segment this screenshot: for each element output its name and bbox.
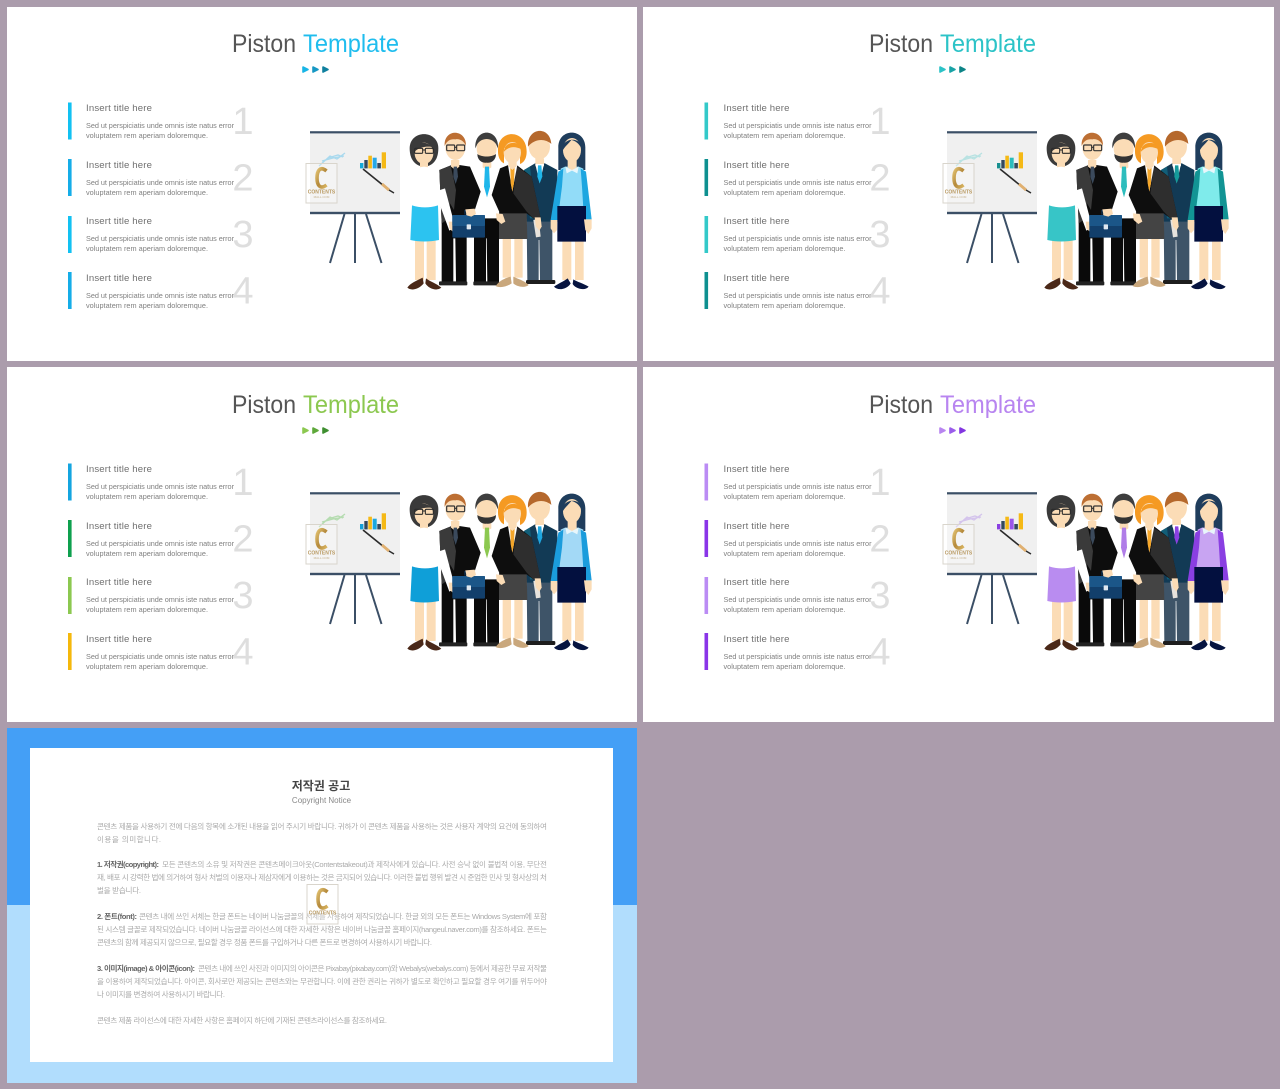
intro paragraph bbox=[97, 821, 547, 844]
item 4: Insert title here bbox=[724, 634, 790, 645]
item 3 bbox=[68, 575, 254, 617]
title: Piston bbox=[869, 391, 933, 419]
item 4: 4 bbox=[869, 632, 891, 674]
item 4: voluptatem rem aperiam doloremque. bbox=[86, 662, 208, 671]
item 3: Sed ut perspiciatis unde omnis iste natus error bbox=[86, 595, 235, 604]
item 3: Sed ut perspiciatis unde omnis iste natus error bbox=[724, 234, 872, 243]
section 2 font: 된 시스템 글꼴로 제작되었습니다. 네이버 나눔글꼴 라이선스에 대한 자세한 사항은 네이버 나눔글꼴 홈페이지(hangeul.naver.com)를 참조하세요. 폰트는 bbox=[97, 924, 547, 934]
item 1 bbox=[68, 101, 254, 143]
watermark logo: CONTENTS bbox=[945, 190, 973, 196]
watermark logo bbox=[306, 164, 337, 203]
item 4 bbox=[68, 632, 254, 674]
item 3 bbox=[704, 575, 891, 617]
presentation board bbox=[947, 131, 1037, 263]
section 1 copyright: 재, 배포 시 강력한 법에 의거하여 형사 처벌의 이용자나 제삼자에게 이용하는 것은 금지되어 있습니다. 이러한 불법 행위 발견 시 준엄한 민사 및 형사상의 처 bbox=[97, 872, 547, 882]
watermark logo bbox=[943, 524, 974, 564]
item 2: 2 bbox=[869, 518, 891, 560]
item 3: voluptatem rem aperiam doloremque. bbox=[724, 244, 846, 253]
section 3 image and icon: 을 이용하여 제작되었습니다. 아이콘, 회사로만 제공되는 콘텐츠와는 무관합니다. 이에 관한 권리는 귀하가 별도로 확인하고 필요할 경우 여기를 위두어야 bbox=[97, 976, 547, 986]
item 2: voluptatem rem aperiam doloremque. bbox=[724, 188, 846, 197]
item 2 bbox=[704, 158, 891, 200]
business team illustration bbox=[407, 492, 592, 650]
item 4: Insert title here bbox=[86, 273, 152, 284]
business team illustration bbox=[1044, 131, 1229, 289]
item 1: Sed ut perspiciatis unde omnis iste natus error bbox=[86, 121, 235, 130]
item 2: Sed ut perspiciatis unde omnis iste natus error bbox=[86, 539, 235, 548]
section 1 copyright bbox=[97, 859, 547, 895]
item 4: Sed ut perspiciatis unde omnis iste natus error bbox=[86, 652, 235, 661]
item 1 bbox=[68, 462, 254, 504]
presentation board bbox=[947, 492, 1037, 624]
item 4: Sed ut perspiciatis unde omnis iste natus error bbox=[86, 291, 235, 300]
item 4: Sed ut perspiciatis unde omnis iste natus error bbox=[724, 291, 872, 300]
item 1: Insert title here bbox=[86, 103, 152, 114]
item 2: 2 bbox=[232, 518, 254, 560]
item 3: 3 bbox=[869, 575, 891, 617]
item 3 bbox=[704, 214, 891, 256]
section 2 font: 콘텐츠 내에 쓰인 서체는 한글 폰트는 네이버 나눔글꼴의 서체를 사용하여 제작되었습니다. 한글 외의 모든 폰트는 Windows System에 포함 bbox=[139, 911, 547, 921]
item 3: Sed ut perspiciatis unde omnis iste natus error bbox=[724, 595, 872, 604]
watermark logo bbox=[943, 164, 974, 203]
item 3: voluptatem rem aperiam doloremque. bbox=[86, 244, 208, 253]
watermark logo: CONTENTS bbox=[309, 910, 337, 916]
item 3: Insert title here bbox=[86, 577, 152, 588]
section 1 copyright: 모든 콘텐츠의 소유 및 저작권은 콘텐츠메이크아웃(Contentstakeout)과 제작사에게 있습니다. 사전 승낙 없이 불법적 이용, 무단전 bbox=[162, 859, 547, 869]
arrow markers bbox=[303, 67, 328, 72]
title: Template bbox=[940, 391, 1036, 419]
licence closing line: 콘텐츠 제품 라이선스에 대한 자세한 사항은 홈페이지 하단에 기재된 콘텐츠라이선스를 참조하세요. bbox=[97, 1015, 387, 1025]
item 2: Sed ut perspiciatis unde omnis iste natus error bbox=[86, 178, 235, 187]
section 1 copyright: 1. 저작권(copyright): bbox=[97, 859, 159, 869]
item 1 bbox=[704, 101, 891, 143]
intro paragraph: 이용을 의미합니다. bbox=[97, 834, 161, 844]
notice heading: Copyright Notice bbox=[292, 796, 352, 805]
item 1: 1 bbox=[232, 101, 254, 143]
item 2: voluptatem rem aperiam doloremque. bbox=[86, 188, 208, 197]
title: Piston bbox=[232, 30, 296, 58]
arrow markers bbox=[940, 67, 965, 72]
item 1: Insert title here bbox=[724, 103, 790, 114]
item 2: 2 bbox=[869, 158, 891, 200]
item 4 bbox=[68, 270, 254, 312]
item 2 bbox=[704, 518, 891, 560]
title bbox=[869, 391, 1036, 419]
item 2: voluptatem rem aperiam doloremque. bbox=[86, 549, 208, 558]
section 3 image and icon bbox=[97, 963, 547, 999]
watermark logo: MALL.COM bbox=[951, 556, 967, 560]
item 3: 3 bbox=[869, 214, 891, 256]
watermark logo bbox=[307, 884, 338, 924]
item 2 bbox=[68, 518, 254, 560]
watermark logo: MALL.COM bbox=[314, 195, 330, 199]
arrow markers bbox=[303, 428, 328, 433]
item 3: 3 bbox=[232, 575, 254, 617]
item 1: voluptatem rem aperiam doloremque. bbox=[724, 131, 846, 140]
section 3 image and icon: 3. 이미지(image) & 아이콘(icon): bbox=[97, 963, 195, 973]
item 2: Sed ut perspiciatis unde omnis iste natus error bbox=[724, 178, 872, 187]
item 4: voluptatem rem aperiam doloremque. bbox=[724, 662, 846, 671]
item 4: voluptatem rem aperiam doloremque. bbox=[86, 301, 208, 310]
item 1 bbox=[704, 462, 891, 504]
item 2: voluptatem rem aperiam doloremque. bbox=[724, 549, 846, 558]
section 3 image and icon: 콘텐츠 내에 쓰인 사진과 이미지의 아이콘은 Pixabay(pixabay.com)와 Webalys(webalys.com) 등에서 제공한 무료 저작물 bbox=[198, 963, 547, 973]
title bbox=[869, 30, 1036, 58]
item 4: 4 bbox=[869, 270, 891, 312]
item 2 bbox=[68, 158, 254, 200]
item 2: 2 bbox=[232, 158, 254, 200]
title: Template bbox=[940, 30, 1036, 58]
item 2: Sed ut perspiciatis unde omnis iste natus error bbox=[724, 539, 872, 548]
notice heading bbox=[292, 778, 352, 805]
item 3: voluptatem rem aperiam doloremque. bbox=[724, 605, 846, 614]
business team illustration bbox=[1044, 492, 1229, 650]
section 1 copyright: 벌을 받습니다. bbox=[97, 885, 141, 895]
panel: copyright notice bbox=[7, 728, 637, 1083]
item 1: Sed ut perspiciatis unde omnis iste natus error bbox=[724, 482, 872, 491]
item 2: Insert title here bbox=[724, 160, 790, 171]
item 3 bbox=[68, 214, 254, 256]
item 4: 4 bbox=[232, 632, 254, 674]
item 4: 4 bbox=[232, 270, 254, 312]
presentation board bbox=[310, 131, 400, 263]
item 2: Insert title here bbox=[86, 521, 152, 532]
item 4 bbox=[704, 632, 891, 674]
watermark logo: CONTENTS bbox=[308, 550, 336, 556]
item 1: Sed ut perspiciatis unde omnis iste natus error bbox=[86, 482, 235, 491]
arrow markers bbox=[940, 428, 965, 433]
watermark logo: MALL.COM bbox=[951, 195, 967, 199]
item 1: Insert title here bbox=[724, 464, 790, 475]
watermark logo: CONTENTS bbox=[945, 550, 973, 556]
panel: slide 4 purple bbox=[643, 367, 1274, 722]
item 3: Sed ut perspiciatis unde omnis iste natus error bbox=[86, 234, 235, 243]
item 1: Sed ut perspiciatis unde omnis iste natus error bbox=[724, 121, 872, 130]
section 2 font bbox=[97, 911, 547, 947]
title: Template bbox=[303, 30, 399, 58]
section 3 image and icon: 나 이미지를 변경하여 사용하시기 바랍니다. bbox=[97, 989, 225, 999]
item 1: 1 bbox=[232, 462, 254, 504]
business team illustration bbox=[407, 131, 592, 289]
watermark logo: MALL.COM bbox=[314, 556, 330, 560]
title: Template bbox=[303, 391, 399, 419]
section 2 font: 콘텐츠의 함께 제공되지 않으므로, 필요할 경우 정품 폰트를 구입하거나 다른 폰트로 변경하여 사용하시기 바랍니다. bbox=[97, 937, 432, 947]
item 3: Insert title here bbox=[86, 216, 152, 227]
panel: slide 2 teal bbox=[643, 7, 1274, 361]
item 2: Insert title here bbox=[724, 521, 790, 532]
title bbox=[232, 391, 399, 419]
item 1: voluptatem rem aperiam doloremque. bbox=[86, 131, 208, 140]
item 1: 1 bbox=[869, 462, 891, 504]
title: Piston bbox=[869, 30, 933, 58]
item 3: 3 bbox=[232, 214, 254, 256]
item 1: 1 bbox=[869, 101, 891, 143]
item 3: Insert title here bbox=[724, 216, 790, 227]
item 1: Insert title here bbox=[86, 464, 152, 475]
item 4 bbox=[704, 270, 891, 312]
intro paragraph: 콘텐츠 제품을 사용하기 전에 다음의 항목에 소개된 내용을 읽어 주시기 바랍니다. 귀하가 이 콘텐츠 제품을 사용하는 것은 사용자 계약의 요건에 동의하여 bbox=[97, 821, 547, 831]
presentation board bbox=[310, 492, 400, 624]
panel: slide 1 cyan bbox=[7, 7, 637, 361]
item 4: Insert title here bbox=[724, 273, 790, 284]
item 4: Sed ut perspiciatis unde omnis iste natus error bbox=[724, 652, 872, 661]
section 2 font: 2. 폰트(font): bbox=[97, 912, 137, 921]
item 3: voluptatem rem aperiam doloremque. bbox=[86, 605, 208, 614]
item 1: voluptatem rem aperiam doloremque. bbox=[724, 492, 846, 501]
item 1: voluptatem rem aperiam doloremque. bbox=[86, 492, 208, 501]
panel: slide 3 multicolour bbox=[7, 367, 637, 722]
item 4: Insert title here bbox=[86, 634, 152, 645]
title: Piston bbox=[232, 391, 296, 419]
item 3: Insert title here bbox=[724, 577, 790, 588]
item 4: voluptatem rem aperiam doloremque. bbox=[724, 301, 846, 310]
watermark logo: CONTENTS bbox=[308, 190, 336, 196]
title bbox=[232, 30, 399, 58]
watermark logo bbox=[306, 524, 337, 564]
notice heading: 저작권 공고 bbox=[292, 778, 350, 793]
item 2: Insert title here bbox=[86, 160, 152, 171]
